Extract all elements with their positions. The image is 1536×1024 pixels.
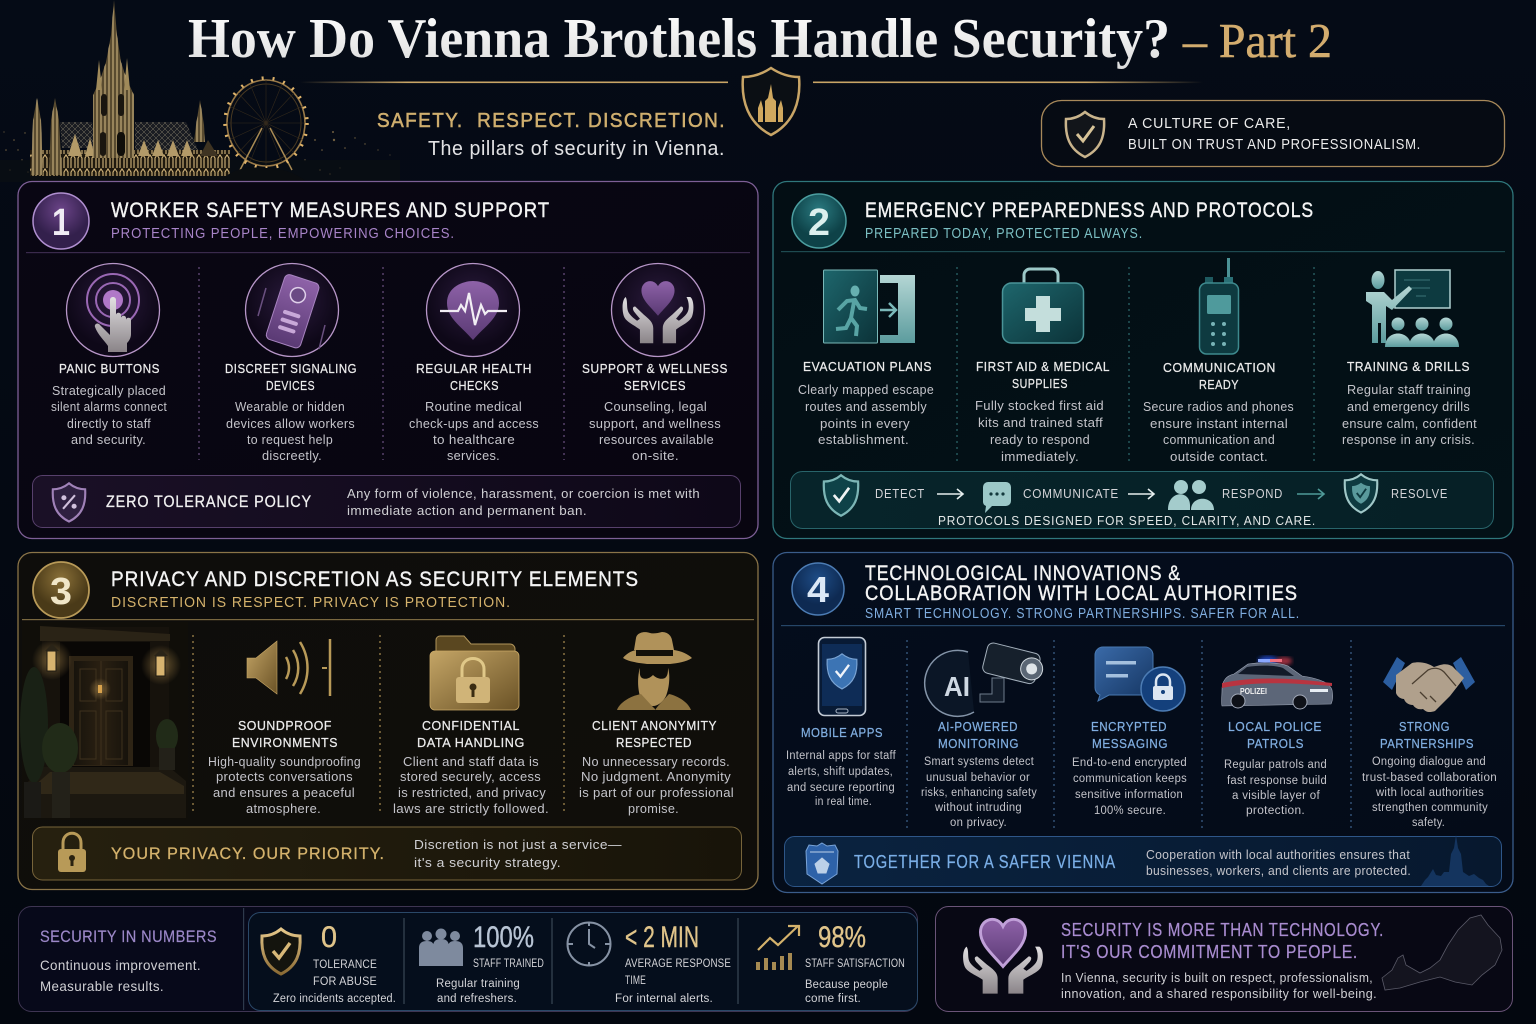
zero tolerance bar xyxy=(32,476,740,528)
text: devices allow workers xyxy=(226,417,355,431)
stat: zero tolerance: 0 xyxy=(321,921,337,954)
icon: gold shield xyxy=(262,929,300,974)
text: CONFIDENTIAL xyxy=(422,718,520,733)
text: with local authorities xyxy=(1375,787,1484,799)
text: High-quality soundproofing xyxy=(208,755,361,769)
icon: clock xyxy=(567,922,611,966)
text: AI-POWERED xyxy=(938,719,1018,734)
arrow xyxy=(1128,489,1154,499)
text: Routine medical xyxy=(425,400,522,414)
stat: satisfaction xyxy=(756,921,905,1005)
tagline: The pillars of security in Vienna. xyxy=(428,138,725,160)
text: Wearable or hidden xyxy=(235,400,345,414)
icon: handheld radio xyxy=(1200,258,1238,354)
text: Regular staff training xyxy=(1347,383,1471,397)
item: anonymity xyxy=(579,632,734,816)
text: and security. xyxy=(71,433,146,447)
text: protects conversations xyxy=(216,770,353,784)
text: without intruding xyxy=(934,802,1022,814)
item: communication xyxy=(1143,258,1294,464)
nave wall xyxy=(30,150,230,178)
icon: smartphone shield xyxy=(818,638,866,716)
protocol flow bar: RESOLVE xyxy=(1391,486,1448,501)
text: Smart systems detect xyxy=(924,756,1034,768)
title: – Part 2 xyxy=(1182,13,1332,68)
item: partnerships xyxy=(1362,657,1497,829)
item: mobile apps xyxy=(786,638,896,808)
icon: chat bubble xyxy=(983,482,1011,513)
stat: satisfaction: STAFF SATISFACTION xyxy=(805,958,905,970)
text xyxy=(975,359,1110,464)
text: alerts, shift updates, xyxy=(788,766,893,778)
stat: staff trained: STAFF TRAINED xyxy=(473,958,544,970)
text: resources available xyxy=(599,433,714,447)
item: evacuation plans xyxy=(798,270,934,447)
stat: response time: For internal alerts. xyxy=(615,993,713,1005)
heading 1: PROTECTING PEOPLE, EMPOWERING CHOICES. xyxy=(111,226,455,242)
text: ENCRYPTED xyxy=(1091,719,1167,734)
text: check-ups and access xyxy=(409,417,539,431)
text: End-to-end encrypted xyxy=(1072,757,1187,769)
text xyxy=(1061,920,1384,1001)
text xyxy=(1362,719,1497,829)
text: Client and staff data is xyxy=(403,755,539,769)
text: SERVICES xyxy=(624,378,686,393)
item: police patrols xyxy=(1222,656,1333,817)
text: ensure instant internal xyxy=(1150,417,1288,431)
text: No judgment. Anonymity xyxy=(581,770,731,784)
icon: panic button xyxy=(66,264,160,356)
text: kits and trained staff xyxy=(978,416,1103,430)
icon: resolve shield xyxy=(1345,474,1377,513)
icon: trainer and audience xyxy=(1366,270,1459,347)
badge 1 xyxy=(33,193,89,249)
text: PATROLS xyxy=(1247,736,1304,751)
item: AI monitoring xyxy=(921,642,1046,829)
icon: handshake xyxy=(1383,657,1475,712)
text: CLIENT ANONYMITY xyxy=(592,718,717,733)
icon: hands holding heart xyxy=(963,919,1043,994)
protocol flow bar xyxy=(790,472,1494,528)
map silhouette decoration xyxy=(1382,915,1502,990)
stat: staff trained xyxy=(419,921,544,1005)
icon: first aid kit xyxy=(1002,269,1084,343)
icon: police car: POLIZEI xyxy=(1240,687,1267,696)
text: directly to staff xyxy=(67,417,151,431)
collaboration bar xyxy=(784,835,1502,886)
title: How Do Vienna Brothels Handle Security? xyxy=(188,8,1170,70)
intro text: Continuous improvement. xyxy=(40,957,201,973)
item: soundproof xyxy=(208,639,361,816)
text: DATA HANDLING xyxy=(417,735,525,750)
arrow xyxy=(1297,489,1324,499)
text: Clearly mapped escape xyxy=(798,383,934,397)
text: MOBILE APPS xyxy=(801,725,883,740)
icon: crest shield with cathedral xyxy=(743,68,799,135)
item: training xyxy=(1342,270,1477,447)
text: Secure radios and phones xyxy=(1143,400,1294,414)
text: strengthen community xyxy=(1372,802,1488,814)
privacy bar: it's a security strategy. xyxy=(414,855,561,870)
text xyxy=(393,718,549,816)
text: outside contact. xyxy=(1170,450,1268,464)
bottom panel: commitment to people xyxy=(936,906,1512,1012)
collaboration bar: TOGETHER FOR A SAFER VIENNA xyxy=(854,852,1116,872)
badge 2 xyxy=(792,194,846,248)
text: points in every xyxy=(820,417,910,431)
stat: zero tolerance: FOR ABUSE xyxy=(313,976,377,988)
text: DISCREET SIGNALING xyxy=(225,361,357,376)
ferris wheel xyxy=(225,78,307,170)
panel 2: emergency preparedness xyxy=(773,182,1513,538)
icon: anonymous figure xyxy=(617,632,692,710)
text xyxy=(225,361,357,463)
badge 4 xyxy=(792,563,844,615)
icon: shield percent xyxy=(53,483,85,522)
heading 3 xyxy=(111,567,639,611)
zero tolerance bar: Any form of violence, harassment, or coercion is met with xyxy=(347,486,700,501)
icon: AI camera: AI xyxy=(944,671,970,702)
text xyxy=(409,361,539,463)
text: EVACUATION PLANS xyxy=(803,359,932,374)
icon: locked folder xyxy=(430,636,519,710)
text: promise. xyxy=(628,802,679,816)
icon: hands and heart xyxy=(612,264,704,356)
text: No unnecessary records. xyxy=(582,755,730,769)
text: FIRST AID & MEDICAL xyxy=(976,359,1110,374)
text: and ensures a peaceful xyxy=(213,786,355,800)
icon: group of staff xyxy=(419,928,463,966)
stat: response time: AVERAGE RESPONSE xyxy=(625,958,731,970)
icon: AI camera xyxy=(925,642,1046,716)
protocol flow bar: DETECT xyxy=(875,486,925,501)
text: COMMUNICATION xyxy=(1163,360,1276,375)
callout: culture of care xyxy=(1042,100,1504,166)
text xyxy=(1342,359,1477,447)
tagline: SAFETY. RESPECT. DISCRETION. xyxy=(377,109,726,132)
tagline xyxy=(377,109,726,160)
icon: speaker and sound wall xyxy=(247,639,330,696)
skyline decoration xyxy=(1421,835,1489,886)
text: stored securely, access xyxy=(400,770,541,784)
icon: rising chart xyxy=(756,926,799,970)
text: is restricted, and privacy xyxy=(398,786,546,800)
text: is part of our professional xyxy=(579,786,734,800)
text: MONITORING xyxy=(938,736,1019,751)
badge 4: 4 xyxy=(807,569,829,610)
text xyxy=(1072,719,1187,817)
text: discreetly. xyxy=(262,449,322,463)
text: RESPECTED xyxy=(616,735,692,750)
text: PANIC BUTTONS xyxy=(59,361,160,376)
heading 1 xyxy=(111,198,550,242)
gothic gables xyxy=(68,134,193,156)
item: wellness services xyxy=(582,264,728,463)
heading 4: TECHNOLOGICAL INNOVATIONS & xyxy=(865,561,1181,585)
text: and secure reporting xyxy=(787,782,895,794)
text xyxy=(921,719,1037,829)
text: 100% secure. xyxy=(1094,805,1166,817)
text: laws are strictly followed. xyxy=(393,802,549,816)
text: communication keeps xyxy=(1073,773,1187,785)
collaboration bar: Cooperation with local authorities ensures that xyxy=(1146,848,1410,862)
icon: shield check xyxy=(1066,112,1104,157)
callout: culture of care: A CULTURE OF CARE, xyxy=(1128,115,1291,132)
intro text xyxy=(40,927,217,994)
heading 4: SMART TECHNOLOGY. STRONG PARTNERSHIPS. SAFER FOR ALL. xyxy=(865,606,1300,622)
main tower and spire xyxy=(93,0,134,158)
text: CHECKS xyxy=(450,378,499,393)
text: Counseling, legal xyxy=(604,400,707,414)
text: ENVIRONMENTS xyxy=(232,735,338,750)
stat: satisfaction: come first. xyxy=(805,993,861,1005)
text: trust-based collaboration xyxy=(1362,772,1497,784)
hero illustration: Vienna cathedral and ferris wheel at night xyxy=(0,0,400,182)
intro text: SECURITY IN NUMBERS xyxy=(40,927,217,946)
privacy bar xyxy=(32,827,742,880)
item: health checks xyxy=(409,264,539,463)
text: REGULAR HEALTH xyxy=(416,361,532,376)
heading 2: EMERGENCY PREPAREDNESS AND PROTOCOLS xyxy=(865,198,1314,222)
text: DEVICES xyxy=(266,378,315,393)
text: establishment. xyxy=(818,433,909,447)
text: to request help xyxy=(247,433,333,447)
text: innovation, and a shared responsibility for well-being. xyxy=(1061,986,1377,1001)
text: Fully stocked first aid xyxy=(975,399,1104,413)
text: SUPPORT & WELLNESS xyxy=(582,361,728,376)
text xyxy=(798,359,934,447)
text: a visible layer of xyxy=(1232,790,1321,802)
illustration: discreet entrance door xyxy=(20,622,188,820)
text: In Vienna, security is built on respect, professionalism, xyxy=(1061,970,1373,985)
item: signaling devices xyxy=(225,264,357,463)
icon: detect shield xyxy=(824,475,858,516)
side towers xyxy=(31,98,43,175)
text: Ongoing dialogue and xyxy=(1372,756,1486,768)
text: immediately. xyxy=(1001,450,1079,464)
text: IT'S OUR COMMITMENT TO PEOPLE. xyxy=(1061,942,1358,962)
text: support, and wellness xyxy=(589,417,721,431)
text: routes and assembly xyxy=(805,400,927,414)
text xyxy=(786,725,896,808)
badge 3: 3 xyxy=(50,571,72,613)
heading 2: PREPARED TODAY, PROTECTED ALWAYS. xyxy=(865,226,1143,242)
heading 1: WORKER SAFETY MEASURES AND SUPPORT xyxy=(111,198,550,222)
text: in real time. xyxy=(815,796,872,808)
text: unusual behavior or xyxy=(926,772,1030,784)
protocol flow bar: RESPOND xyxy=(1222,486,1283,501)
text: protection. xyxy=(1246,805,1305,817)
panel 4: technology and collaboration xyxy=(773,552,1513,892)
icon: padlock xyxy=(58,833,86,872)
item: first aid xyxy=(975,269,1110,464)
icon: chat with lock xyxy=(1095,647,1185,711)
stat: staff trained: Regular training xyxy=(436,978,520,990)
text: response in any crisis. xyxy=(1342,433,1475,447)
item: data handling xyxy=(393,636,549,816)
text xyxy=(1224,719,1327,817)
stat: zero tolerance: TOLERANCE xyxy=(313,959,377,971)
protocol flow bar: PROTOCOLS DESIGNED FOR SPEED, CLARITY, AND CARE. xyxy=(938,513,1316,528)
intro text: Measurable results. xyxy=(40,978,164,994)
text xyxy=(579,718,734,816)
text: services. xyxy=(447,449,500,463)
text: STRONG xyxy=(1399,719,1450,734)
city lights xyxy=(3,131,391,175)
privacy bar: Discretion is not just a service— xyxy=(414,837,622,852)
collaboration bar: businesses, workers, and clients are protected. xyxy=(1146,864,1411,878)
text: silent alarms connect xyxy=(51,400,167,414)
stat: response time: TIME xyxy=(625,975,646,987)
text: on privacy. xyxy=(950,817,1007,829)
icon: police badge xyxy=(806,843,838,884)
icon: people xyxy=(1168,480,1214,510)
text xyxy=(582,361,728,463)
nave roof xyxy=(60,122,95,148)
text: Regular patrols and xyxy=(1224,759,1327,771)
zero tolerance bar: immediate action and permanent ban. xyxy=(347,503,587,518)
text xyxy=(1143,360,1294,464)
stat: staff trained: 100% xyxy=(473,921,534,954)
text: LOCAL POLICE xyxy=(1228,719,1322,734)
arrow xyxy=(937,489,963,499)
text: fast response build xyxy=(1227,775,1327,787)
badge 2: 2 xyxy=(808,202,830,244)
text: risks, enhancing safety xyxy=(921,787,1037,799)
heading 4 xyxy=(865,561,1300,622)
icon: exit door xyxy=(824,270,915,343)
text: and emergency drills xyxy=(1347,400,1470,414)
text: SOUNDPROOF xyxy=(238,718,332,733)
text xyxy=(51,361,167,447)
heading 2 xyxy=(865,198,1314,242)
text: PARTNERSHIPS xyxy=(1380,736,1474,751)
text: to healthcare xyxy=(433,433,515,447)
text: ready to respond xyxy=(990,433,1090,447)
text: communication and xyxy=(1163,433,1275,447)
heading 4: COLLABORATION WITH LOCAL AUTHORITIES xyxy=(865,581,1298,605)
panel 3: privacy and discretion xyxy=(18,552,758,890)
heading 3: PRIVACY AND DISCRETION AS SECURITY ELEMENTS xyxy=(111,567,639,591)
header rules xyxy=(300,82,1203,83)
text: MESSAGING xyxy=(1092,736,1168,751)
text: Strategically placed xyxy=(52,384,166,398)
stat: response time: < 2 MIN xyxy=(625,921,699,954)
zero tolerance bar: ZERO TOLERANCE POLICY xyxy=(106,492,312,511)
text: TRAINING & DRILLS xyxy=(1347,359,1470,374)
heading 3: DISCRETION IS RESPECT. PRIVACY IS PROTECTION. xyxy=(111,595,511,611)
protocol flow bar: COMMUNICATE xyxy=(1023,486,1119,501)
item: panic buttons xyxy=(51,264,167,447)
icon: heart pulse xyxy=(426,264,520,356)
item: encrypted messaging xyxy=(1072,647,1187,817)
stat: satisfaction: Because people xyxy=(805,979,888,991)
bottom panel: security in numbers xyxy=(18,906,918,1012)
text xyxy=(208,718,361,816)
text: atmosphere. xyxy=(246,802,321,816)
text: READY xyxy=(1199,377,1239,392)
text: Internal apps for staff xyxy=(786,750,896,762)
badge 3 xyxy=(33,562,89,618)
panel 1: worker safety xyxy=(18,182,758,538)
text: safety. xyxy=(1412,817,1445,829)
text: SECURITY IS MORE THAN TECHNOLOGY. xyxy=(1061,920,1384,940)
text: on-site. xyxy=(632,449,679,463)
stat: response time xyxy=(567,921,731,1005)
stat: staff trained: and refreshers. xyxy=(437,993,517,1005)
text: ensure calm, confident xyxy=(1342,417,1477,431)
stat: zero tolerance: Zero incidents accepted. xyxy=(273,993,396,1005)
callout: culture of care: BUILT ON TRUST AND PROFESSIONALISM. xyxy=(1128,136,1421,153)
text: sensitive information xyxy=(1075,789,1183,801)
icon: wearable device xyxy=(246,264,338,356)
stat: satisfaction: 98% xyxy=(818,921,866,954)
text: SUPPLIES xyxy=(1012,376,1068,391)
badge 1: 1 xyxy=(52,202,70,244)
icon: police car xyxy=(1222,656,1333,709)
stat: zero tolerance xyxy=(262,921,396,1005)
privacy bar: YOUR PRIVACY. OUR PRIORITY. xyxy=(111,844,385,863)
